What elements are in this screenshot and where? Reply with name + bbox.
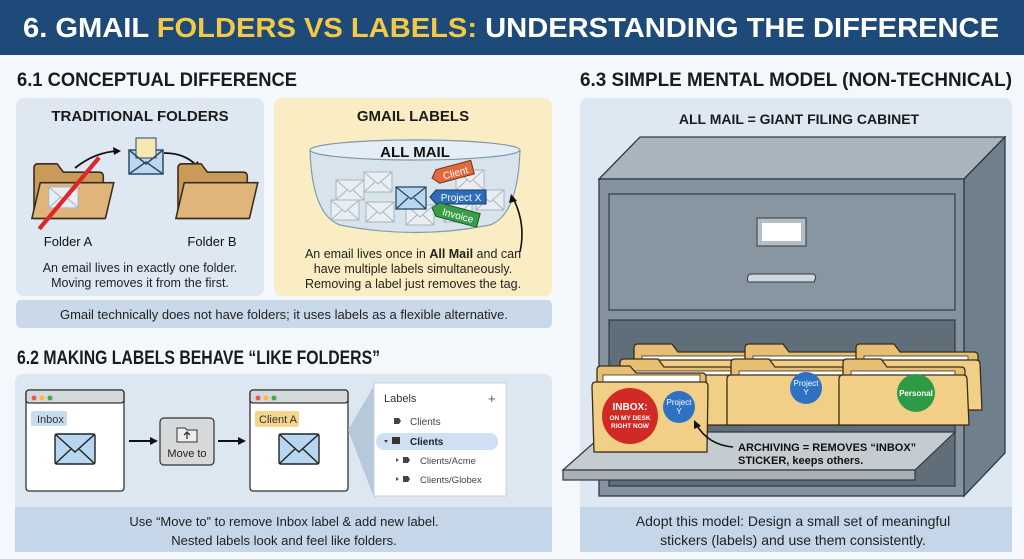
heading: all mail cabinet: ALL MAIL = GIANT FILING CABINET <box>679 111 920 127</box>
tag: project x: Project X <box>441 193 482 204</box>
folders in drawer <box>616 344 982 425</box>
labels sidebar: Clients/Globex <box>420 475 482 486</box>
icon: filing cabinet <box>599 137 1005 496</box>
text: archiving note: ARCHIVING = REMOVES “INBOX” <box>738 442 916 454</box>
window: client A <box>250 390 348 491</box>
callout: gmail has no folders: Gmail technically does not have folders; it uses labels as a flexible alternative. <box>60 307 508 322</box>
button: move to: Move to <box>167 448 207 460</box>
panel: labels like folders <box>15 374 552 552</box>
sticker: project y 2: Project <box>794 379 819 388</box>
panel: gmail labels <box>274 98 552 296</box>
sticker: personal: Personal <box>899 389 933 398</box>
front folder with stickers: INBOX: <box>612 402 648 413</box>
sticker: project y 2: Y <box>803 388 809 397</box>
arrow: curved up <box>514 200 522 252</box>
tag: client <box>430 160 475 185</box>
folder labels: Folder A <box>44 234 93 249</box>
tag: project x <box>430 190 486 204</box>
sticker: project y <box>663 391 695 423</box>
arrow: envelope to B <box>164 153 197 166</box>
labels sidebar: Clients <box>410 437 444 448</box>
callout: gmail has no folders <box>16 300 552 328</box>
front folder with stickers: RIGHT NOW <box>611 423 650 430</box>
tag: invoice <box>430 201 480 227</box>
shelf <box>563 432 955 470</box>
front folder with stickers <box>592 366 708 452</box>
title banner: 6. GMAIL FOLDERS VS LABELS: UNDERSTANDING THE DIFFERENCE <box>23 12 999 43</box>
panel: traditional folders <box>16 98 264 296</box>
icon: folder A crossed <box>32 158 114 229</box>
labels sidebar: Clients/Acme <box>420 456 476 467</box>
window: client A: Client A <box>259 414 298 426</box>
panel: labels like folders: Nested labels look and feel like folders. <box>171 533 397 548</box>
front folder with stickers: Y <box>676 407 682 416</box>
labels sidebar: + <box>488 391 496 406</box>
heading 6.3: 6.3 SIMPLE MENTAL MODEL (NON-TECHNICAL) <box>580 70 1012 91</box>
heading: gmail labels: GMAIL LABELS <box>357 108 469 125</box>
tag: invoice: Invoice <box>441 207 475 226</box>
panel: traditional folders: Moving removes it from the first. <box>51 276 229 290</box>
arrow: archiving <box>696 424 733 447</box>
window: inbox: Inbox <box>37 414 64 426</box>
labels sidebar <box>348 383 506 500</box>
icon: all mail bowl <box>310 140 520 232</box>
arrow <box>218 440 240 442</box>
text: labels description: An email lives once in All Mail and can <box>305 247 521 261</box>
window: inbox <box>26 390 124 491</box>
panel: mental model: STICKER, keeps others. <box>738 455 863 467</box>
tag: client: Client <box>442 165 470 182</box>
text: move to explanation: Use “Move to” to remove Inbox label & add new label. <box>129 514 439 529</box>
labels sidebar: Labels <box>384 393 417 405</box>
heading: traditional folders: TRADITIONAL FOLDERS <box>51 108 229 125</box>
arrow: A to envelope <box>75 151 118 168</box>
sticker: inbox <box>602 388 658 444</box>
arrow <box>129 440 153 442</box>
heading 6.2: 6.2 MAKING LABELS BEHAVE “LIKE FOLDERS” <box>17 348 380 369</box>
title banner <box>0 0 1024 55</box>
text: folder description: An email lives in exactly one folder. <box>43 261 237 275</box>
panel: mental model: stickers (labels) and use them consistently. <box>660 532 926 548</box>
icon: folder B <box>176 164 258 218</box>
panel: gmail labels: Removing a label just removes the tag. <box>305 277 521 291</box>
icon: open envelope <box>129 138 163 174</box>
button: move to <box>160 418 214 465</box>
labels sidebar: Clients <box>410 417 441 428</box>
sticker: project y 2 <box>790 372 822 404</box>
text: adopt model: Adopt this model: Design a small set of meaningful <box>636 513 950 529</box>
panel: traditional folders: Folder B <box>187 234 237 249</box>
heading 6.1: 6.1 CONCEPTUAL DIFFERENCE <box>17 70 297 91</box>
front folder with stickers: Project <box>667 398 692 407</box>
icon: all mail bowl: ALL MAIL <box>380 144 450 161</box>
sticker: personal <box>897 374 935 412</box>
front folder with stickers: ON MY DESK <box>609 415 651 422</box>
panel: gmail labels: have multiple labels simultaneously. <box>314 262 512 276</box>
panel: mental model <box>563 98 1012 552</box>
